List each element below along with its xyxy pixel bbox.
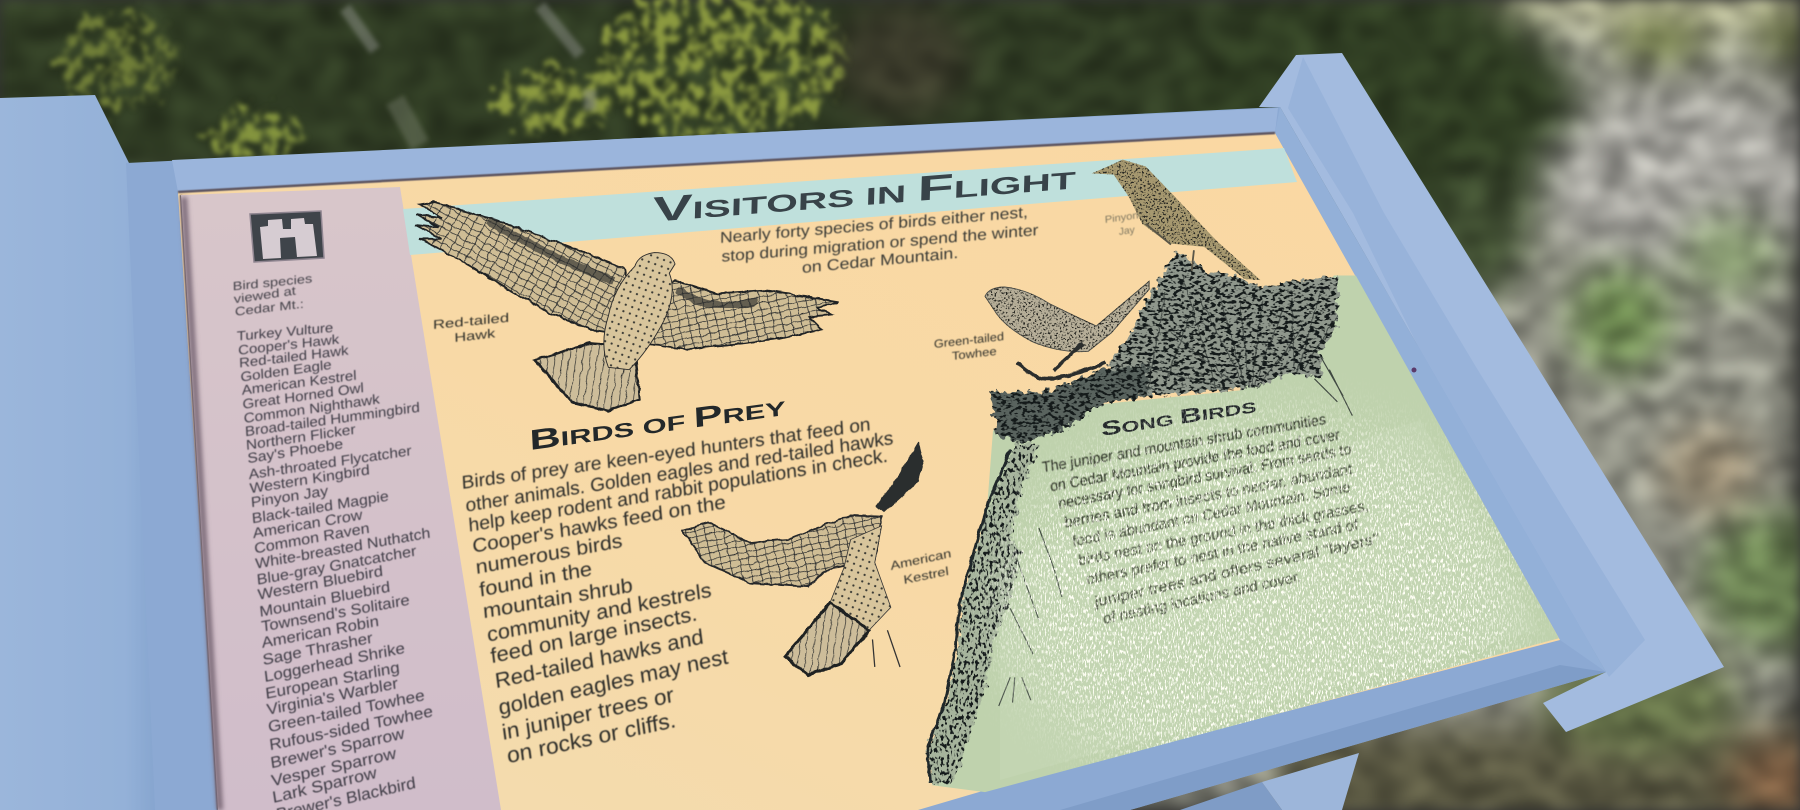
- species list: Mountain Bluebird: [259, 579, 391, 621]
- text block: song birds: of nesting locations and cover.: [1102, 568, 1302, 628]
- text block: birds of prey: numerous birds: [475, 530, 624, 579]
- foliage sprigs: [60, 0, 850, 158]
- panel: cream background: [178, 133, 1560, 810]
- species list: Pinyon Jay: [250, 483, 330, 511]
- text block: song birds: The juniper and mountain shrub communities: [1041, 411, 1327, 476]
- text block: song birds: others prefer to nest in the native stand of: [1086, 516, 1360, 588]
- illustration: green-tailed towhee: [985, 281, 1149, 379]
- text block: birds of prey: mountain shrub: [482, 575, 634, 623]
- species list: Common Raven: [254, 521, 370, 557]
- species list: American Robin: [261, 613, 380, 652]
- label: pinyon jay: [1105, 210, 1139, 238]
- hawk right wing dark band: [677, 289, 758, 306]
- shrub mass on ridge: [1091, 250, 1337, 404]
- text block: birds of prey: other animals. Golden eagles and red-tailed hawks: [465, 427, 894, 516]
- species list: Northern Flicker: [246, 421, 356, 453]
- species list: American Crow: [252, 507, 364, 542]
- arm inner shaded face: [1288, 57, 1645, 677]
- worn scratched surface on song birds panel: [1000, 420, 1540, 780]
- species list: Black-tailed Magpie: [251, 489, 389, 527]
- sign frame: [126, 107, 1606, 810]
- illustration: red-tailed hawk: [416, 202, 839, 411]
- frame top rail: [172, 108, 1278, 192]
- hawk right wing: [641, 280, 839, 349]
- hawk body and head: [604, 253, 675, 370]
- panel edge shadow: [178, 133, 1275, 810]
- title: VISITORS IN FLIGHT: [652, 157, 1077, 230]
- hawk left wing: [416, 202, 631, 333]
- text block: song birds: birds nest on the ground in the thick grasses,: [1078, 497, 1369, 569]
- species list: Rufous-sided Towhee: [268, 703, 434, 754]
- species list: Red-tailed Hawk: [239, 343, 349, 371]
- kestrel wing tip: [876, 442, 924, 513]
- intro text: Nearly forty species of birds either nest,: [720, 204, 1028, 247]
- intro text: [720, 204, 1038, 277]
- text block: birds of prey: Cooper's hawks feed on the: [472, 492, 727, 558]
- cliff edge foliage: [928, 442, 1039, 783]
- hawk left wing dark band: [488, 220, 614, 281]
- illustration: shrubs and cliff: [928, 250, 1352, 783]
- species list: Sage Thrasher: [262, 630, 373, 669]
- hawk tail: [535, 343, 639, 411]
- text block: birds of prey: Birds of prey are keen-eyed hunters that feed on: [461, 413, 871, 493]
- text block: song birds: on Cedar Mountain provide the food and cover: [1049, 426, 1340, 495]
- text block: birds of prey: found in the: [478, 558, 593, 602]
- label: red-tailed hawk: Red-tailed: [433, 311, 509, 332]
- text block: birds of prey: community and kestrels: [486, 579, 713, 647]
- species list: Townsend's Solitaire: [260, 592, 410, 636]
- left post: [0, 95, 156, 810]
- label: red-tailed hawk: Hawk: [454, 326, 496, 345]
- label: green-tailed towhee: [934, 331, 1004, 363]
- text block: birds of prey: [461, 413, 894, 768]
- cliff dark outline: [928, 450, 1010, 783]
- label: American kestrel: [890, 546, 952, 587]
- text block: birds of prey: Red-tailed hawks and: [494, 625, 705, 693]
- intro text: on Cedar Mountain.: [802, 245, 958, 277]
- pedestal under the sign: [1180, 753, 1359, 810]
- kestrel body: [830, 526, 891, 630]
- text block: birds of prey: golden eagles may nest: [497, 644, 730, 720]
- right bracket arm: [1259, 53, 1724, 732]
- species list: Western Kingbird: [249, 462, 370, 497]
- text block: birds of prey: on rocks or cliffs.: [505, 707, 677, 768]
- species list: Green-tailed Towhee: [267, 687, 426, 736]
- panel: species sidebar: [181, 187, 501, 810]
- intro text: stop during migration or spend the winter: [721, 222, 1038, 266]
- kestrel spread wing: [682, 515, 882, 587]
- species list: American Kestrel: [241, 368, 357, 398]
- frame bottom rail shading: [1060, 665, 1606, 810]
- illustration: pinyon jay: [1092, 160, 1261, 280]
- text block: birds of prey: in juniper trees or: [500, 682, 675, 745]
- species list: Brewer's Sparrow: [270, 725, 406, 772]
- kestrel tail fan: [785, 603, 869, 675]
- species heading: viewed at: [233, 283, 297, 306]
- species list: White-breasted Nuthatch: [255, 526, 431, 573]
- kestrel prey tail: [872, 630, 900, 667]
- illustration: American kestrel: [682, 442, 924, 675]
- species list: Common Nighthawk: [243, 391, 380, 426]
- text block: song birds: berries and from insects to nectar, abundant: [1064, 461, 1354, 532]
- species list: Ash-throated Flycatcher: [248, 442, 412, 482]
- shrub blades: [1148, 276, 1337, 390]
- species list: Lark Sparrow: [271, 764, 378, 807]
- text block: song birds: necessary for songbird survival. From seeds to: [1058, 441, 1352, 513]
- sign panel: [178, 133, 1560, 810]
- species list: [237, 320, 434, 810]
- label: pinyon jay: Pinyon: [1105, 210, 1139, 226]
- frame right rail: [1275, 107, 1606, 672]
- species list: Western Bluebird: [257, 563, 384, 604]
- label: red-tailed hawk: [433, 311, 509, 345]
- label: American kestrel: Kestrel: [903, 564, 949, 587]
- species list: Say's Phoebe: [247, 435, 344, 466]
- species heading: [233, 271, 312, 319]
- panel: song birds green area: [932, 276, 1559, 792]
- label: green-tailed towhee: Green-tailed: [934, 331, 1004, 351]
- heading: birds of prey: BIRDS OF PREY: [529, 390, 786, 456]
- juniper foliage band: [990, 365, 1148, 443]
- text block: birds of prey: feed on large insects.: [489, 602, 699, 668]
- species list: Golden Eagle: [240, 357, 332, 385]
- text block: song birds: [1041, 411, 1380, 628]
- species heading: Cedar Mt.:: [235, 297, 304, 319]
- label: pinyon jay: Jay: [1119, 225, 1135, 238]
- species list: Great Horned Owl: [242, 380, 364, 412]
- icon: binoculars: [250, 211, 324, 262]
- frame hardware dot: [1412, 368, 1416, 372]
- species list: Loggerhead Shrike: [263, 640, 406, 686]
- label: American kestrel: American: [890, 546, 952, 573]
- text block: song birds: food is abundant on Cedar Mountain. Some: [1072, 479, 1351, 551]
- species list: Turkey Vulture: [237, 320, 333, 344]
- species list: European Starling: [265, 659, 400, 703]
- label: green-tailed towhee: Towhee: [952, 346, 997, 363]
- sagebrush tufts: [999, 356, 1352, 706]
- species list: Vesper Sparrow: [270, 744, 398, 790]
- species heading: Bird species: [233, 271, 312, 293]
- teal title band: [403, 148, 1297, 255]
- heading: song birds: SONG BIRDS: [1100, 393, 1257, 441]
- species list: Virginia's Warbler: [266, 675, 399, 719]
- text block: birds of prey: help keep rodent and rabbit populations in check.: [468, 446, 889, 537]
- species list: Broad-tailed Hummingbird: [245, 399, 420, 439]
- text block: song birds: juniper trees and offers several "layers": [1093, 530, 1380, 611]
- species list: Blue-gray Gnatcatcher: [256, 544, 417, 589]
- species list: Cooper's Hawk: [238, 331, 340, 358]
